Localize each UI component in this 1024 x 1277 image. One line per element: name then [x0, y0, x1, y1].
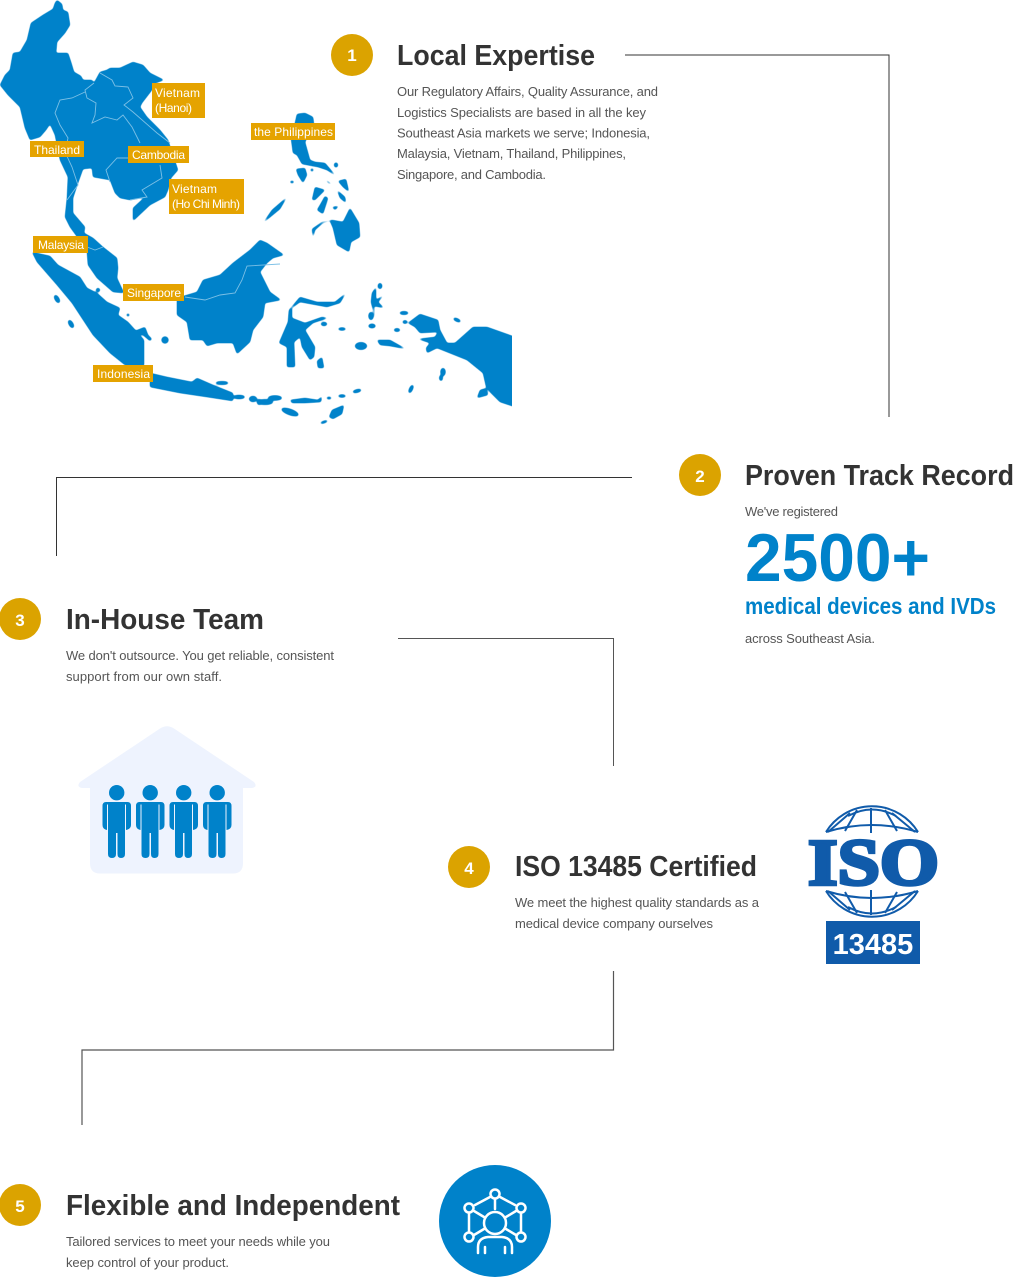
statistic caption: medical devices and IVDs: medical devices and IVDs	[745, 593, 996, 619]
badge: number 2	[679, 454, 721, 496]
map: Southeast Asia	[0, 0, 515, 424]
connector: step 3 to step 4	[398, 638, 614, 766]
badge: number 4: 4	[464, 859, 474, 878]
heading: ISO 13485 Certified: ISO 13485 Certified	[515, 851, 757, 883]
label: Vietnam (Hanoi): Vietnam	[155, 86, 200, 100]
badge: number 3	[0, 598, 41, 640]
globe lines	[826, 806, 918, 917]
map: Java	[150, 373, 233, 401]
connector: step 1 to step 2	[625, 55, 889, 417]
map: Palawan	[263, 197, 287, 223]
badge: number 2: 2	[695, 467, 705, 486]
badge: number 1	[331, 34, 373, 76]
heading: Local Expertise: Local Expertise	[397, 40, 595, 72]
label: Singapore: Singapore	[127, 286, 181, 300]
connector: step 2 to step 3	[56, 478, 632, 556]
icon: ISO 13485 logo	[805, 806, 941, 964]
text block: local expertise description: Our Regulatory Affairs, Quality Assurance, and	[397, 84, 658, 99]
text block: ISO description: medical device company ourselves	[515, 916, 714, 931]
text: across Southeast Asia: across Southeast Asia.	[745, 631, 875, 646]
connector: step 4 to step 5	[82, 971, 614, 1125]
label: Indonesia: Indonesia	[97, 367, 150, 381]
label: Vietnam (Ho Chi Minh): (Ho Chi Minh)	[172, 197, 240, 211]
icon: team in a house	[78, 726, 256, 874]
text: we've registered: We've registered	[745, 504, 838, 519]
badge: number 5	[0, 1184, 41, 1226]
ISO letters: ISO	[808, 826, 939, 900]
heading: In-House Team: In-House Team	[66, 604, 264, 636]
text block: flexible description: Tailored services to meet your needs while you	[66, 1234, 330, 1249]
icon: ISO 13485 logo: 13485	[833, 929, 913, 961]
text block: local expertise description: Southeast Asia markets we serve; Indonesia,	[397, 126, 650, 140]
map: Luzon	[291, 113, 336, 176]
label: Malaysia	[33, 236, 88, 253]
map: country borders	[55, 73, 280, 300]
map: Mindanao	[312, 208, 360, 252]
map: land masses	[0, 0, 515, 424]
label: Cambodia: Cambodia	[132, 148, 185, 162]
map: central Philippines	[296, 168, 349, 214]
text block: local expertise description: Malaysia, Vietnam, Thailand, Philippines,	[397, 146, 626, 161]
label: Vietnam (Hanoi): (Hanoi)	[155, 101, 192, 115]
label: Vietnam (Hanoi)	[152, 83, 205, 118]
text block: ISO description: We meet the highest quality standards as a	[515, 895, 760, 910]
badge: number 3: 3	[15, 611, 25, 630]
badge: number 4	[448, 846, 490, 888]
label: Vietnam (Ho Chi Minh)	[169, 179, 244, 214]
text block: ISO description	[515, 895, 760, 931]
text block: in-house description	[66, 648, 334, 684]
text block: local expertise description: Singapore, and Cambodia.	[397, 167, 546, 182]
map: small islands	[53, 162, 461, 424]
statistic: 2500+: 2500+	[745, 520, 930, 596]
map: Borneo	[177, 240, 284, 354]
badge: number 1: 1	[347, 46, 357, 65]
text block: flexible description: keep control of your product.	[66, 1255, 229, 1270]
text block: flexible description	[66, 1234, 330, 1270]
badge: number 5: 5	[15, 1197, 25, 1216]
map: Sulawesi	[279, 293, 346, 367]
heading: Flexible and Independent: Flexible and Independent	[66, 1190, 400, 1222]
text block: in-house description: We don't outsource. You get reliable, consistent	[66, 648, 334, 663]
map: Buton and Muna	[317, 357, 324, 368]
text block: local expertise description: Logistics Specialists are based in all the key	[397, 105, 646, 120]
text block: local expertise description	[397, 84, 658, 182]
label: Malaysia: Malaysia	[38, 238, 84, 252]
label: Vietnam (Ho Chi Minh): Vietnam	[172, 182, 217, 196]
label: the Philippines: the Philippines	[254, 125, 333, 139]
label: Thailand: Thailand	[34, 143, 80, 157]
text block: in-house description: support from our own staff.	[66, 669, 222, 684]
map: Papua	[408, 314, 515, 407]
map: mainland Southeast Asia	[0, 0, 178, 293]
map: Sumatra	[32, 252, 144, 366]
icon: network person	[439, 1165, 551, 1277]
